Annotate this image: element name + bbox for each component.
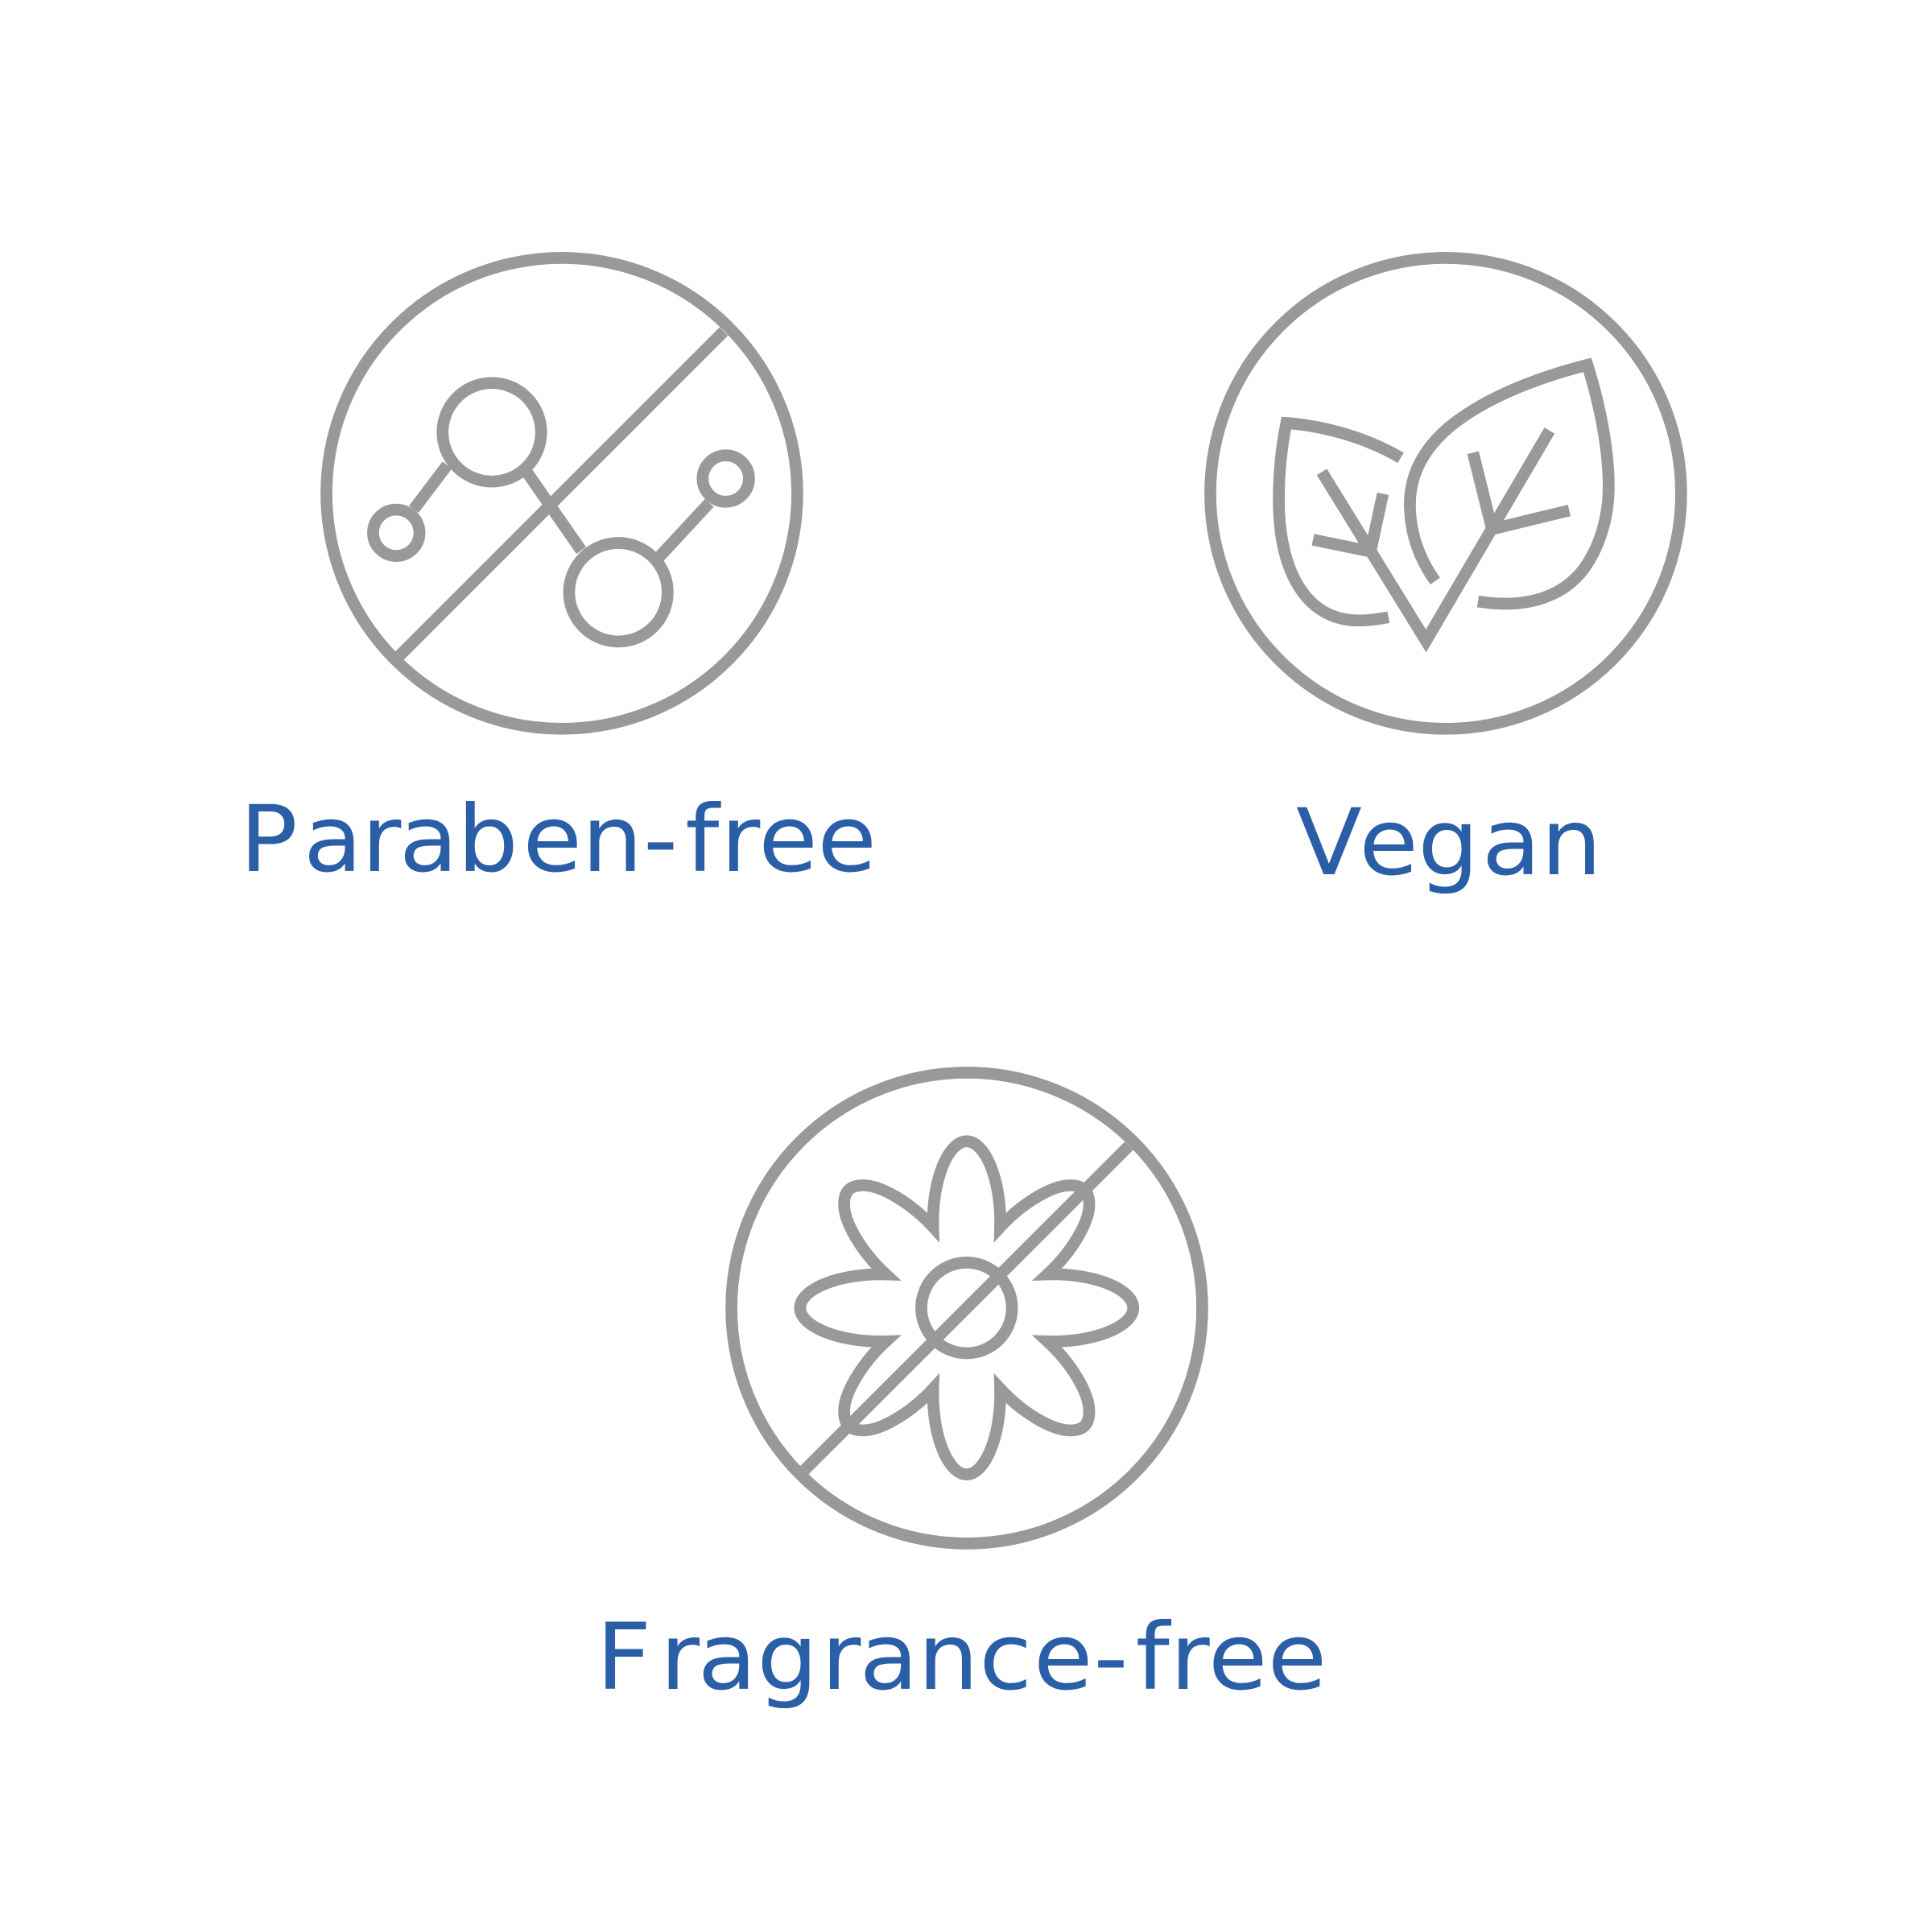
stems and veins <box>1313 431 1569 641</box>
icon: crossed-out molecule <box>327 258 797 729</box>
prohibition slash <box>804 1146 1129 1470</box>
icon: crossed-out flower <box>732 1072 1202 1543</box>
label: Paraben-free: Paraben-free <box>240 786 877 893</box>
molecule nodes and bonds <box>373 383 749 642</box>
flower centre <box>921 1262 1012 1353</box>
panel: vegan <box>1210 258 1681 896</box>
panel: paraben-free <box>240 258 877 893</box>
icon ring <box>327 258 797 729</box>
icon: leaves <box>1210 258 1681 729</box>
label: Vegan: Vegan <box>1296 790 1602 896</box>
label: Fragrance-free: Fragrance-free <box>596 1604 1327 1711</box>
panel: fragrance-free <box>596 1072 1327 1711</box>
icon ring <box>1210 258 1681 729</box>
left leaf <box>1279 423 1401 621</box>
right leaf <box>1410 365 1608 604</box>
icon ring <box>732 1072 1202 1543</box>
prohibition slash <box>399 332 724 655</box>
flower petals <box>800 1141 1133 1475</box>
